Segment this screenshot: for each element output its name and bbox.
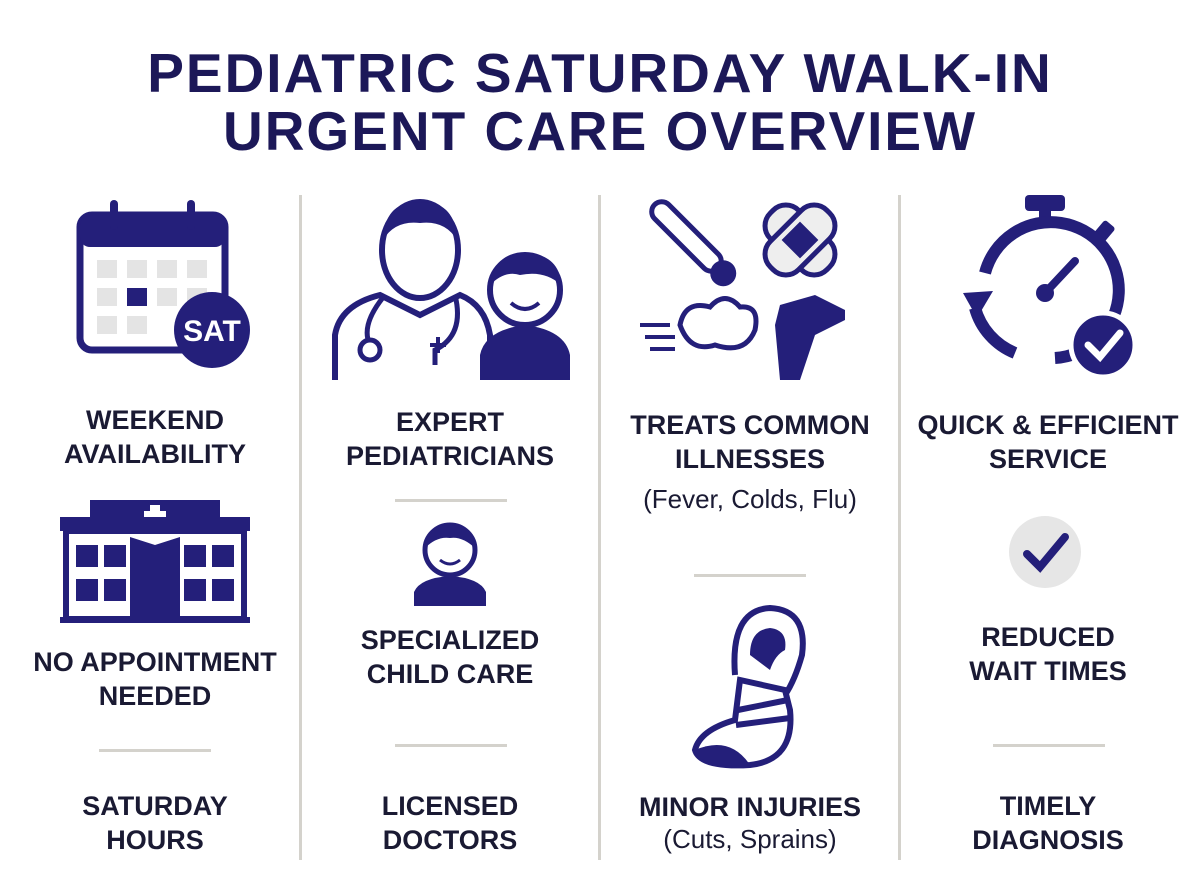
- label: timely diagnosis: [972, 791, 1124, 855]
- sub: fever colds flu: (Fever, Colds, Flu): [643, 484, 857, 514]
- label: licensed doctors: [382, 791, 518, 855]
- label: treats common illnesses: TREATS COMMON: [630, 410, 870, 440]
- label: treats common illnesses: ILLNESSES: [675, 444, 825, 474]
- title: URGENT CARE OVERVIEW: [223, 100, 977, 162]
- icon: doctor and child: [332, 199, 570, 380]
- label: minor injuries: MINOR INJURIES: [639, 792, 861, 822]
- label: no appointment: [33, 647, 277, 711]
- icon: stopwatch: [963, 195, 1132, 374]
- label: timely diagnosis: DIAGNOSIS: [972, 825, 1124, 855]
- icon: child: [414, 522, 486, 606]
- label: expert pediatricians: [346, 407, 554, 471]
- icon: building: [60, 500, 250, 623]
- label: weekend availability: WEEKEND: [86, 405, 224, 435]
- label: treats common illnesses: [630, 410, 870, 474]
- label: expert pediatricians: EXPERT: [396, 407, 504, 437]
- label: reduced wait times: [969, 622, 1127, 686]
- icon: check: [1009, 516, 1081, 588]
- label: quick efficient service: SERVICE: [989, 444, 1107, 474]
- icon: calendar: [76, 200, 250, 368]
- label: no appointment: NO APPOINTMENT: [33, 647, 277, 677]
- label: saturday hours: SATURDAY: [82, 791, 228, 821]
- icon: illness set: [640, 199, 845, 380]
- label: licensed doctors: LICENSED: [382, 791, 518, 821]
- label: weekend availability: AVAILABILITY: [64, 439, 246, 469]
- label: reduced wait times: REDUCED: [981, 622, 1115, 652]
- label: saturday hours: HOURS: [106, 825, 204, 855]
- label: reduced wait times: WAIT TIMES: [969, 656, 1127, 686]
- sub: cuts sprains: (Cuts, Sprains): [663, 824, 837, 854]
- label: expert pediatricians: PEDIATRICIANS: [346, 441, 554, 471]
- title: PEDIATRIC SATURDAY WALK-IN: [147, 42, 1053, 104]
- label: saturday hours: [82, 791, 228, 855]
- label: specialized child care: CHILD CARE: [367, 659, 533, 689]
- label: quick efficient service: QUICK & EFFICIENT: [918, 410, 1178, 440]
- label: timely diagnosis: TIMELY: [1000, 791, 1096, 821]
- label: no appointment: NEEDED: [99, 681, 211, 711]
- title: [147, 42, 1053, 162]
- label: specialized child care: [361, 625, 539, 689]
- label: specialized child care: SPECIALIZED: [361, 625, 539, 655]
- label: quick efficient service: [918, 410, 1178, 474]
- label: weekend availability: [64, 405, 246, 469]
- icon: ear and bandaged foot: [692, 605, 806, 768]
- icon: calendar: SAT: [183, 315, 241, 348]
- label: licensed doctors: DOCTORS: [383, 825, 517, 855]
